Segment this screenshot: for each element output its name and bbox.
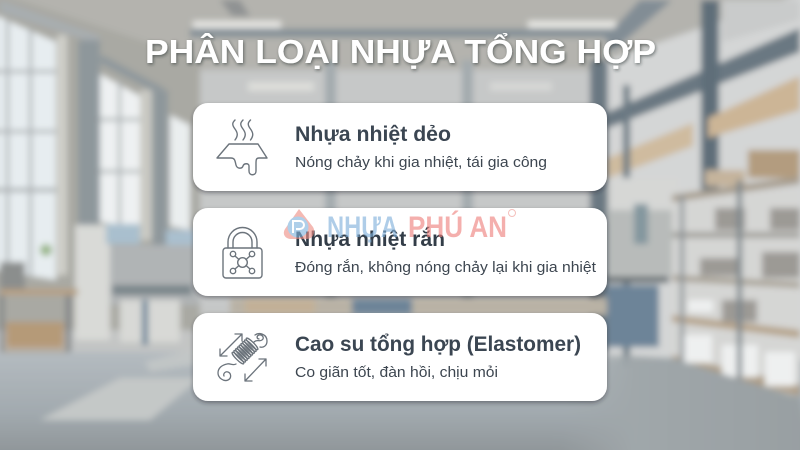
ceiling — [0, 0, 800, 110]
icon: melting plastic with heat — [217, 120, 267, 175]
panel: card 1 thermoplastic — [193, 103, 607, 191]
icon: spring with stretch arrows — [218, 334, 267, 381]
text: description 2: Đóng rắn, không nóng chảy lại khi gia nhiệt — [295, 259, 597, 276]
left window 1 — [0, 15, 56, 280]
watermark logo: Nhựa Phú An: PHÚ AN — [408, 210, 507, 244]
heading: Nhựa nhiệt dẻo: Nhựa nhiệt dẻo — [295, 123, 451, 146]
right wall — [608, 0, 800, 360]
left window 2 — [100, 74, 140, 228]
panel: card 2 thermoset — [193, 208, 607, 296]
heading: Cao su tổng hợp (Elastomer): Cao su tổng hợp (Elastomer) — [295, 333, 581, 356]
watermark logo: Nhựa Phú An — [284, 209, 516, 244]
heading: Nhựa nhiệt rắn: Nhựa nhiệt rắn — [295, 227, 445, 251]
left machines — [75, 225, 110, 340]
text: description 1: Nóng chảy khi gia nhiệt, tái gia công — [295, 154, 547, 171]
left wall — [0, 0, 200, 330]
left window 3 — [170, 115, 190, 230]
watermark logo: Nhựa Phú An: NHỰA — [327, 211, 398, 244]
text: description 3: Co giãn tốt, đàn hồi, chịu mỏi — [295, 364, 498, 381]
center-right machine — [607, 210, 672, 275]
icon: padlock with crosslink network — [223, 228, 262, 278]
title: PHÂN LOẠI NHỰA TỔNG HỢP — [145, 33, 656, 70]
shelves — [672, 190, 800, 395]
floor — [0, 352, 800, 450]
panel: card 3 elastomer — [193, 313, 607, 401]
